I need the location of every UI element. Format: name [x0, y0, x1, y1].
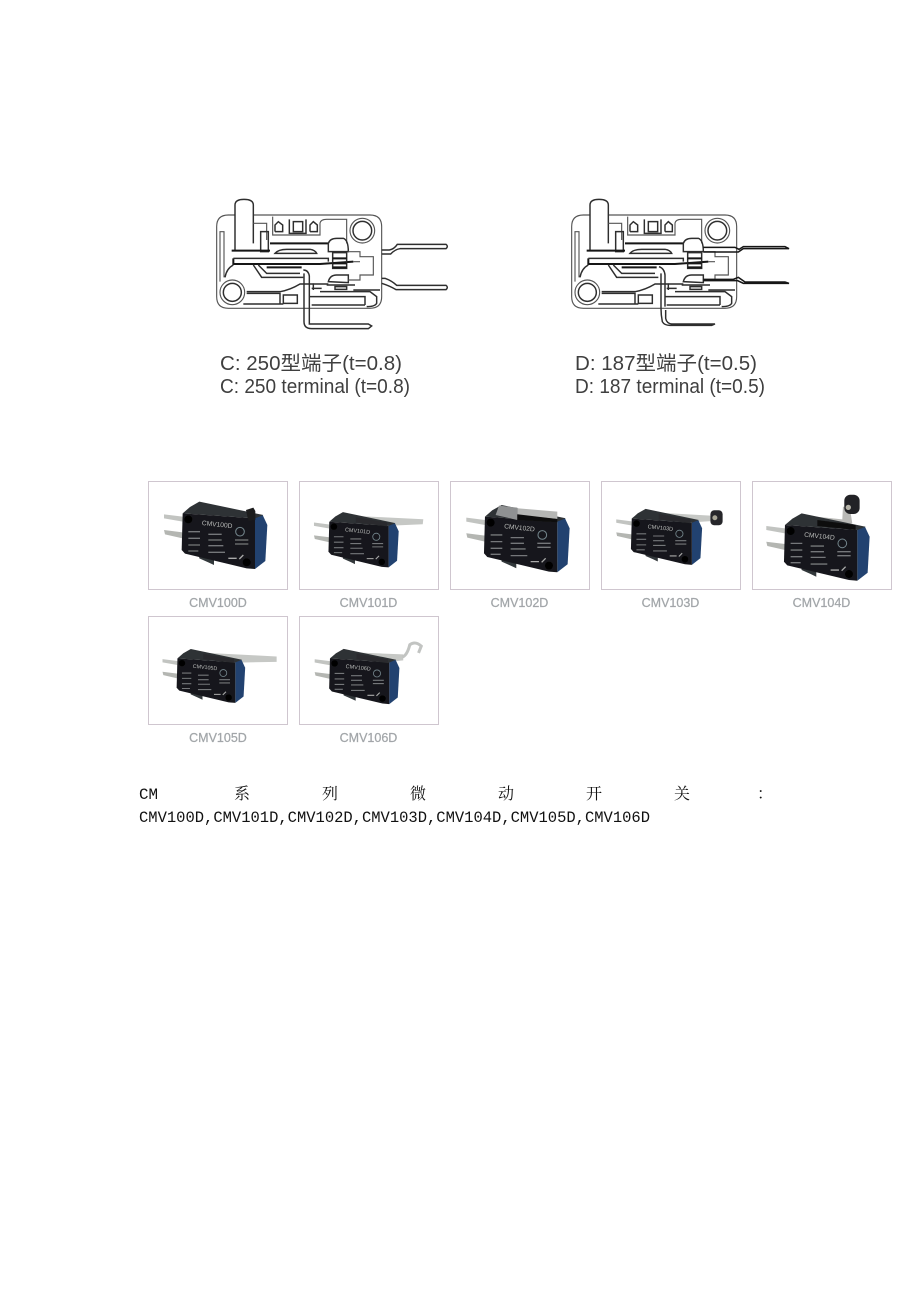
terminals: 250 type — [303, 244, 447, 329]
product card: CMV100D: CMV100D — [189, 596, 247, 610]
product card: CMV102D: CMV102D — [504, 523, 535, 534]
product card: CMV104D: CMV104D — [793, 596, 850, 610]
text: series heading: 开 — [586, 781, 602, 804]
caption: C terminal: C: 250型端子(t=0.8) — [220, 352, 402, 375]
product card: CMV101D: CMV101D — [345, 527, 370, 536]
diagram: D 187 terminal switch — [572, 199, 789, 325]
text: series heading: 列 — [322, 781, 338, 804]
product card: CMV100D: CMV100D — [201, 520, 233, 530]
caption: D terminal — [575, 352, 765, 398]
product card: CMV106D: CMV106D — [340, 731, 397, 745]
product card: CMV104D: CMV104D — [804, 532, 835, 542]
product card: CMV106D: CMV106D — [345, 664, 371, 673]
caption: C terminal: C: 250 terminal (t=0.8) — [220, 376, 410, 398]
text: series heading: CM — [139, 786, 158, 804]
product card: CMV105D — [148, 616, 288, 745]
text: series heading: ： — [757, 781, 773, 804]
product card: CMV102D — [450, 482, 590, 610]
diagram: C 250 terminal switch — [217, 199, 447, 329]
text: series heading: 系 — [234, 781, 250, 804]
product card: CMV101D — [300, 482, 438, 610]
product card: CMV103D: CMV103D — [647, 524, 673, 533]
text: series heading — [139, 781, 773, 804]
product card: CMV100D — [148, 482, 288, 610]
text: series heading: 微 — [410, 781, 426, 804]
product card: CMV105D: CMV105D — [189, 731, 247, 745]
caption: D terminal: D: 187 terminal (t=0.5) — [575, 376, 765, 398]
product card: CMV104D — [752, 482, 892, 610]
switch cross-section body — [572, 199, 737, 308]
text: model list: CMV100D,CMV101D,CMV102D,CMV103D,CMV104D,CMV105D,CMV106D — [139, 809, 650, 827]
text: series heading: 关 — [674, 781, 690, 804]
caption: C terminal — [220, 352, 410, 398]
switch cross-section body — [217, 199, 382, 308]
text: series heading: 动 — [498, 781, 514, 804]
product card: CMV105D: CMV105D — [192, 664, 218, 672]
product card: CMV102D: CMV102D — [491, 596, 548, 610]
product card: CMV103D — [602, 482, 740, 610]
product card: CMV103D: CMV103D — [642, 596, 699, 610]
product card: CMV101D: CMV101D — [340, 596, 397, 610]
caption: D terminal: D: 187型端子(t=0.5) — [575, 352, 757, 375]
terminals: 187 type — [659, 247, 789, 325]
product card: CMV106D — [300, 616, 438, 745]
